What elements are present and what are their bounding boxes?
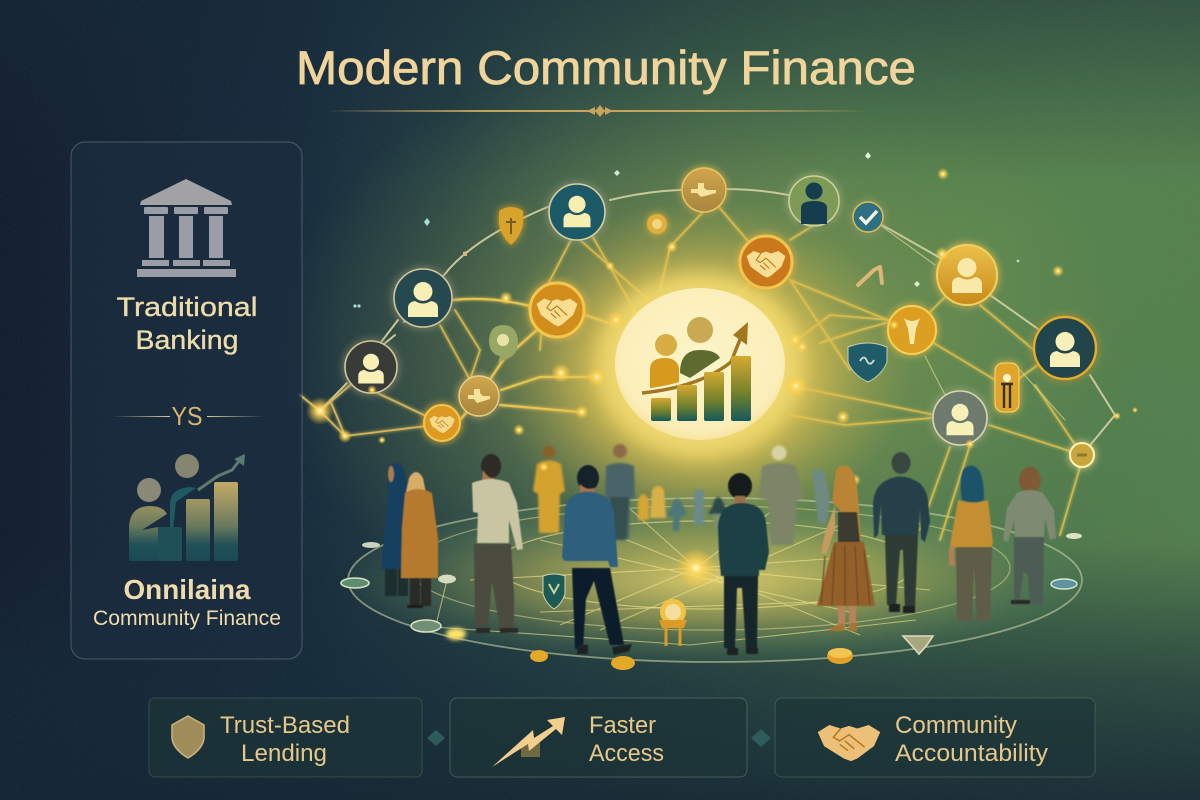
node: tan ledger left	[459, 376, 499, 416]
floor spark	[676, 548, 716, 588]
title underline ornament	[325, 105, 870, 117]
label: trust-based lending	[220, 712, 350, 767]
heading: traditional banking: Traditional	[116, 292, 258, 322]
heading: onnilaina community finance: Onnilaina	[124, 574, 251, 605]
background figures	[533, 444, 830, 545]
people circle	[381, 452, 1056, 655]
floor circle	[348, 498, 1082, 662]
heading: onnilaina community finance: Community Finance	[93, 607, 281, 630]
heading: traditional banking: Banking	[136, 325, 238, 355]
node: dark user left	[345, 341, 397, 393]
icon: rising arrow	[492, 717, 565, 767]
person: dark hooded woman	[381, 463, 410, 596]
sparkle lights	[306, 168, 1138, 486]
title: Modern Community Finance	[296, 41, 916, 94]
node: dark user right	[1034, 317, 1096, 379]
node: dark teal user left	[394, 269, 452, 327]
node: speech bubble	[489, 325, 518, 363]
node: staff icon	[858, 267, 882, 285]
person: blue suit man	[562, 465, 632, 655]
vs divider: YS	[172, 401, 202, 431]
card: faster access	[450, 698, 747, 777]
label: community accountability: Community	[895, 712, 1017, 739]
heading: traditional banking	[116, 292, 258, 355]
central glow halo	[598, 273, 802, 457]
icon: handshake	[818, 725, 880, 761]
label: faster access	[589, 712, 664, 767]
node: coin right	[1070, 443, 1094, 467]
label: faster access: Faster	[589, 712, 656, 739]
node: grey user	[933, 391, 987, 445]
node: coin	[647, 214, 667, 234]
person: woman with pleated skirt	[817, 466, 875, 631]
node: green user	[789, 176, 839, 226]
person: patterned shirt woman	[1003, 467, 1056, 605]
card: trust-based lending	[149, 698, 422, 777]
connector diamonds	[427, 729, 771, 747]
label: community accountability	[895, 712, 1048, 767]
person: tan coat woman	[401, 472, 438, 608]
node: check badge	[853, 202, 883, 232]
node: shield right	[848, 343, 887, 382]
node: lantern	[995, 363, 1019, 412]
label: trust-based lending: Trust-Based	[220, 712, 350, 739]
floor tokens	[341, 533, 1082, 670]
left comparison panel	[71, 142, 302, 659]
node: tan ledger	[682, 168, 726, 212]
small teal sparkles	[353, 152, 1019, 308]
node: teal user	[549, 184, 605, 240]
heading: onnilaina community finance	[93, 574, 281, 630]
card: community accountability	[775, 698, 1095, 777]
person: woman in orange top	[949, 466, 993, 621]
icon: community growth	[129, 454, 245, 561]
node: handshake small	[424, 405, 460, 441]
node: handshake left	[530, 283, 584, 337]
icon: shield	[172, 716, 204, 758]
node: gold emblem	[888, 306, 936, 354]
node: gold user right	[937, 245, 997, 305]
person: dark jacket man	[873, 452, 930, 613]
node: handshake top	[740, 236, 792, 288]
network connections	[300, 189, 1115, 540]
person: dark suit man	[718, 473, 769, 655]
person: beige man	[472, 454, 523, 633]
label: community accountability: Accountability	[895, 740, 1048, 767]
label: faster access: Access	[589, 740, 664, 767]
icon: bank	[137, 179, 236, 277]
label: trust-based lending: Lending	[241, 740, 327, 767]
central emblem	[615, 288, 785, 440]
node: shield	[499, 207, 523, 245]
